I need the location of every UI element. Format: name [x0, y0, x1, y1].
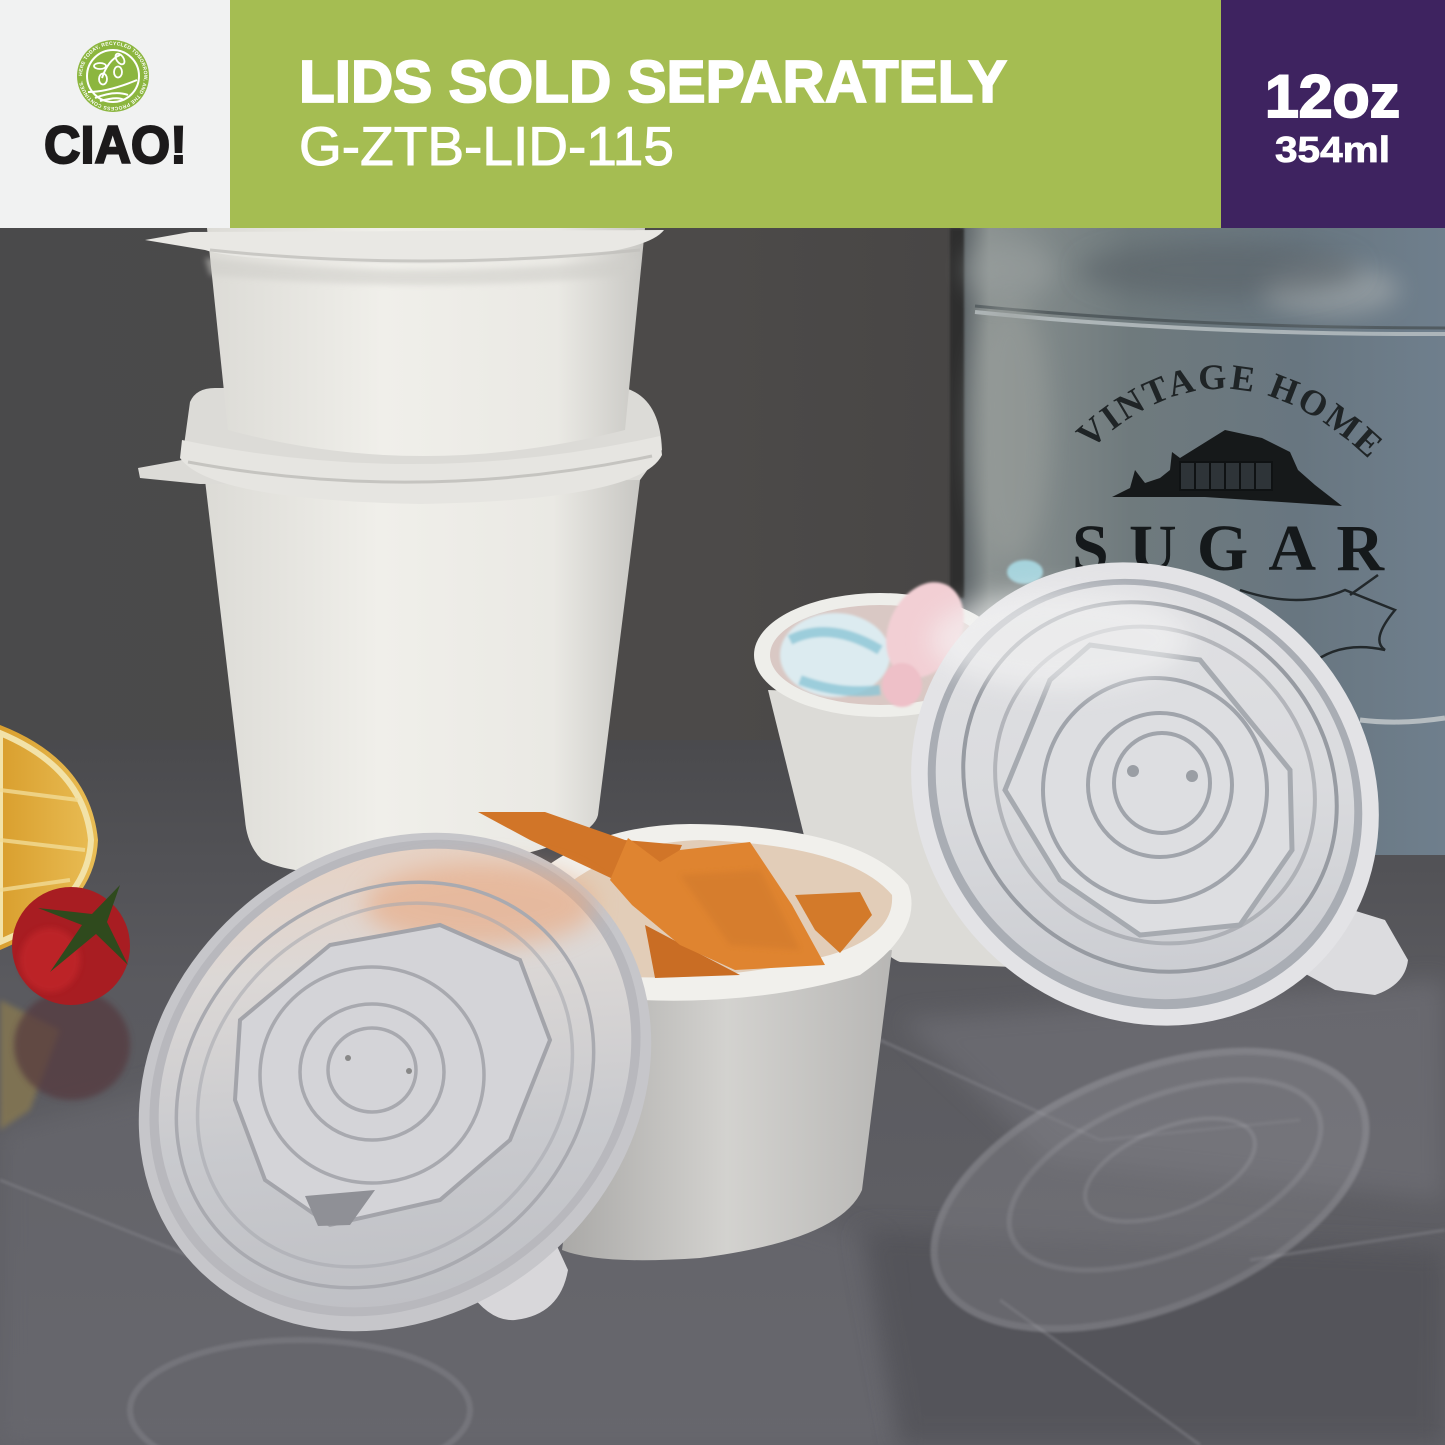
- photo: marble counter: [0, 740, 1445, 1445]
- header: green title banner: [230, 0, 1221, 228]
- photo: transparent lid, leaning right: [816, 466, 1445, 1122]
- text: ounces: 12oz: [1265, 63, 1400, 130]
- canister label: ribbon flourish: [1240, 575, 1395, 665]
- photo: floor reflection of front lid: [130, 1340, 470, 1445]
- marshmallows: [780, 560, 1043, 707]
- header: logo panel: [0, 0, 230, 228]
- text: product code: G-ZTB-LID-115: [299, 115, 674, 177]
- canister label: house drawing: [1112, 430, 1342, 506]
- lid pull tab: [450, 1220, 568, 1320]
- photo: rear paper bowl with marshmallows: [754, 560, 1043, 968]
- logo wordmark: CIAO!: [44, 116, 187, 175]
- icon: round olive emblem: [77, 40, 149, 112]
- photo: front paper bowl with tortilla chips: [478, 812, 912, 1260]
- photo: rear white cup: [145, 228, 664, 456]
- chips: [478, 812, 872, 978]
- photo: second white cup, back rim: [138, 388, 662, 874]
- photo: floor reflection of lid: [894, 995, 1406, 1385]
- heading: lids sold separately: LIDS SOLD SEPARATELY: [299, 49, 1007, 115]
- lid detail: stepped centre: [1005, 645, 1292, 935]
- text: millilitres: 354ml: [1275, 129, 1390, 170]
- photo: cherry tomato: [12, 885, 130, 1100]
- header: purple size panel: [1221, 0, 1445, 228]
- canister label: vintage home: VINTAGE HOME: [1074, 365, 1382, 458]
- photo: background wall: [0, 228, 1445, 758]
- photo: metal sugar canister: [950, 228, 1445, 855]
- canister label: sugar: SUGAR: [1072, 512, 1385, 585]
- photo: transparent lid, front: [38, 729, 752, 1435]
- emblem ring text: HERE TODAY, RECYCLED TOMORROW, AND THE PROCESS CONTINUES.: [78, 42, 148, 110]
- lid detail: stepped centre: [235, 925, 550, 1225]
- photo: second white cup, front rim: [180, 436, 662, 504]
- photo: lemon slice: [0, 725, 98, 1130]
